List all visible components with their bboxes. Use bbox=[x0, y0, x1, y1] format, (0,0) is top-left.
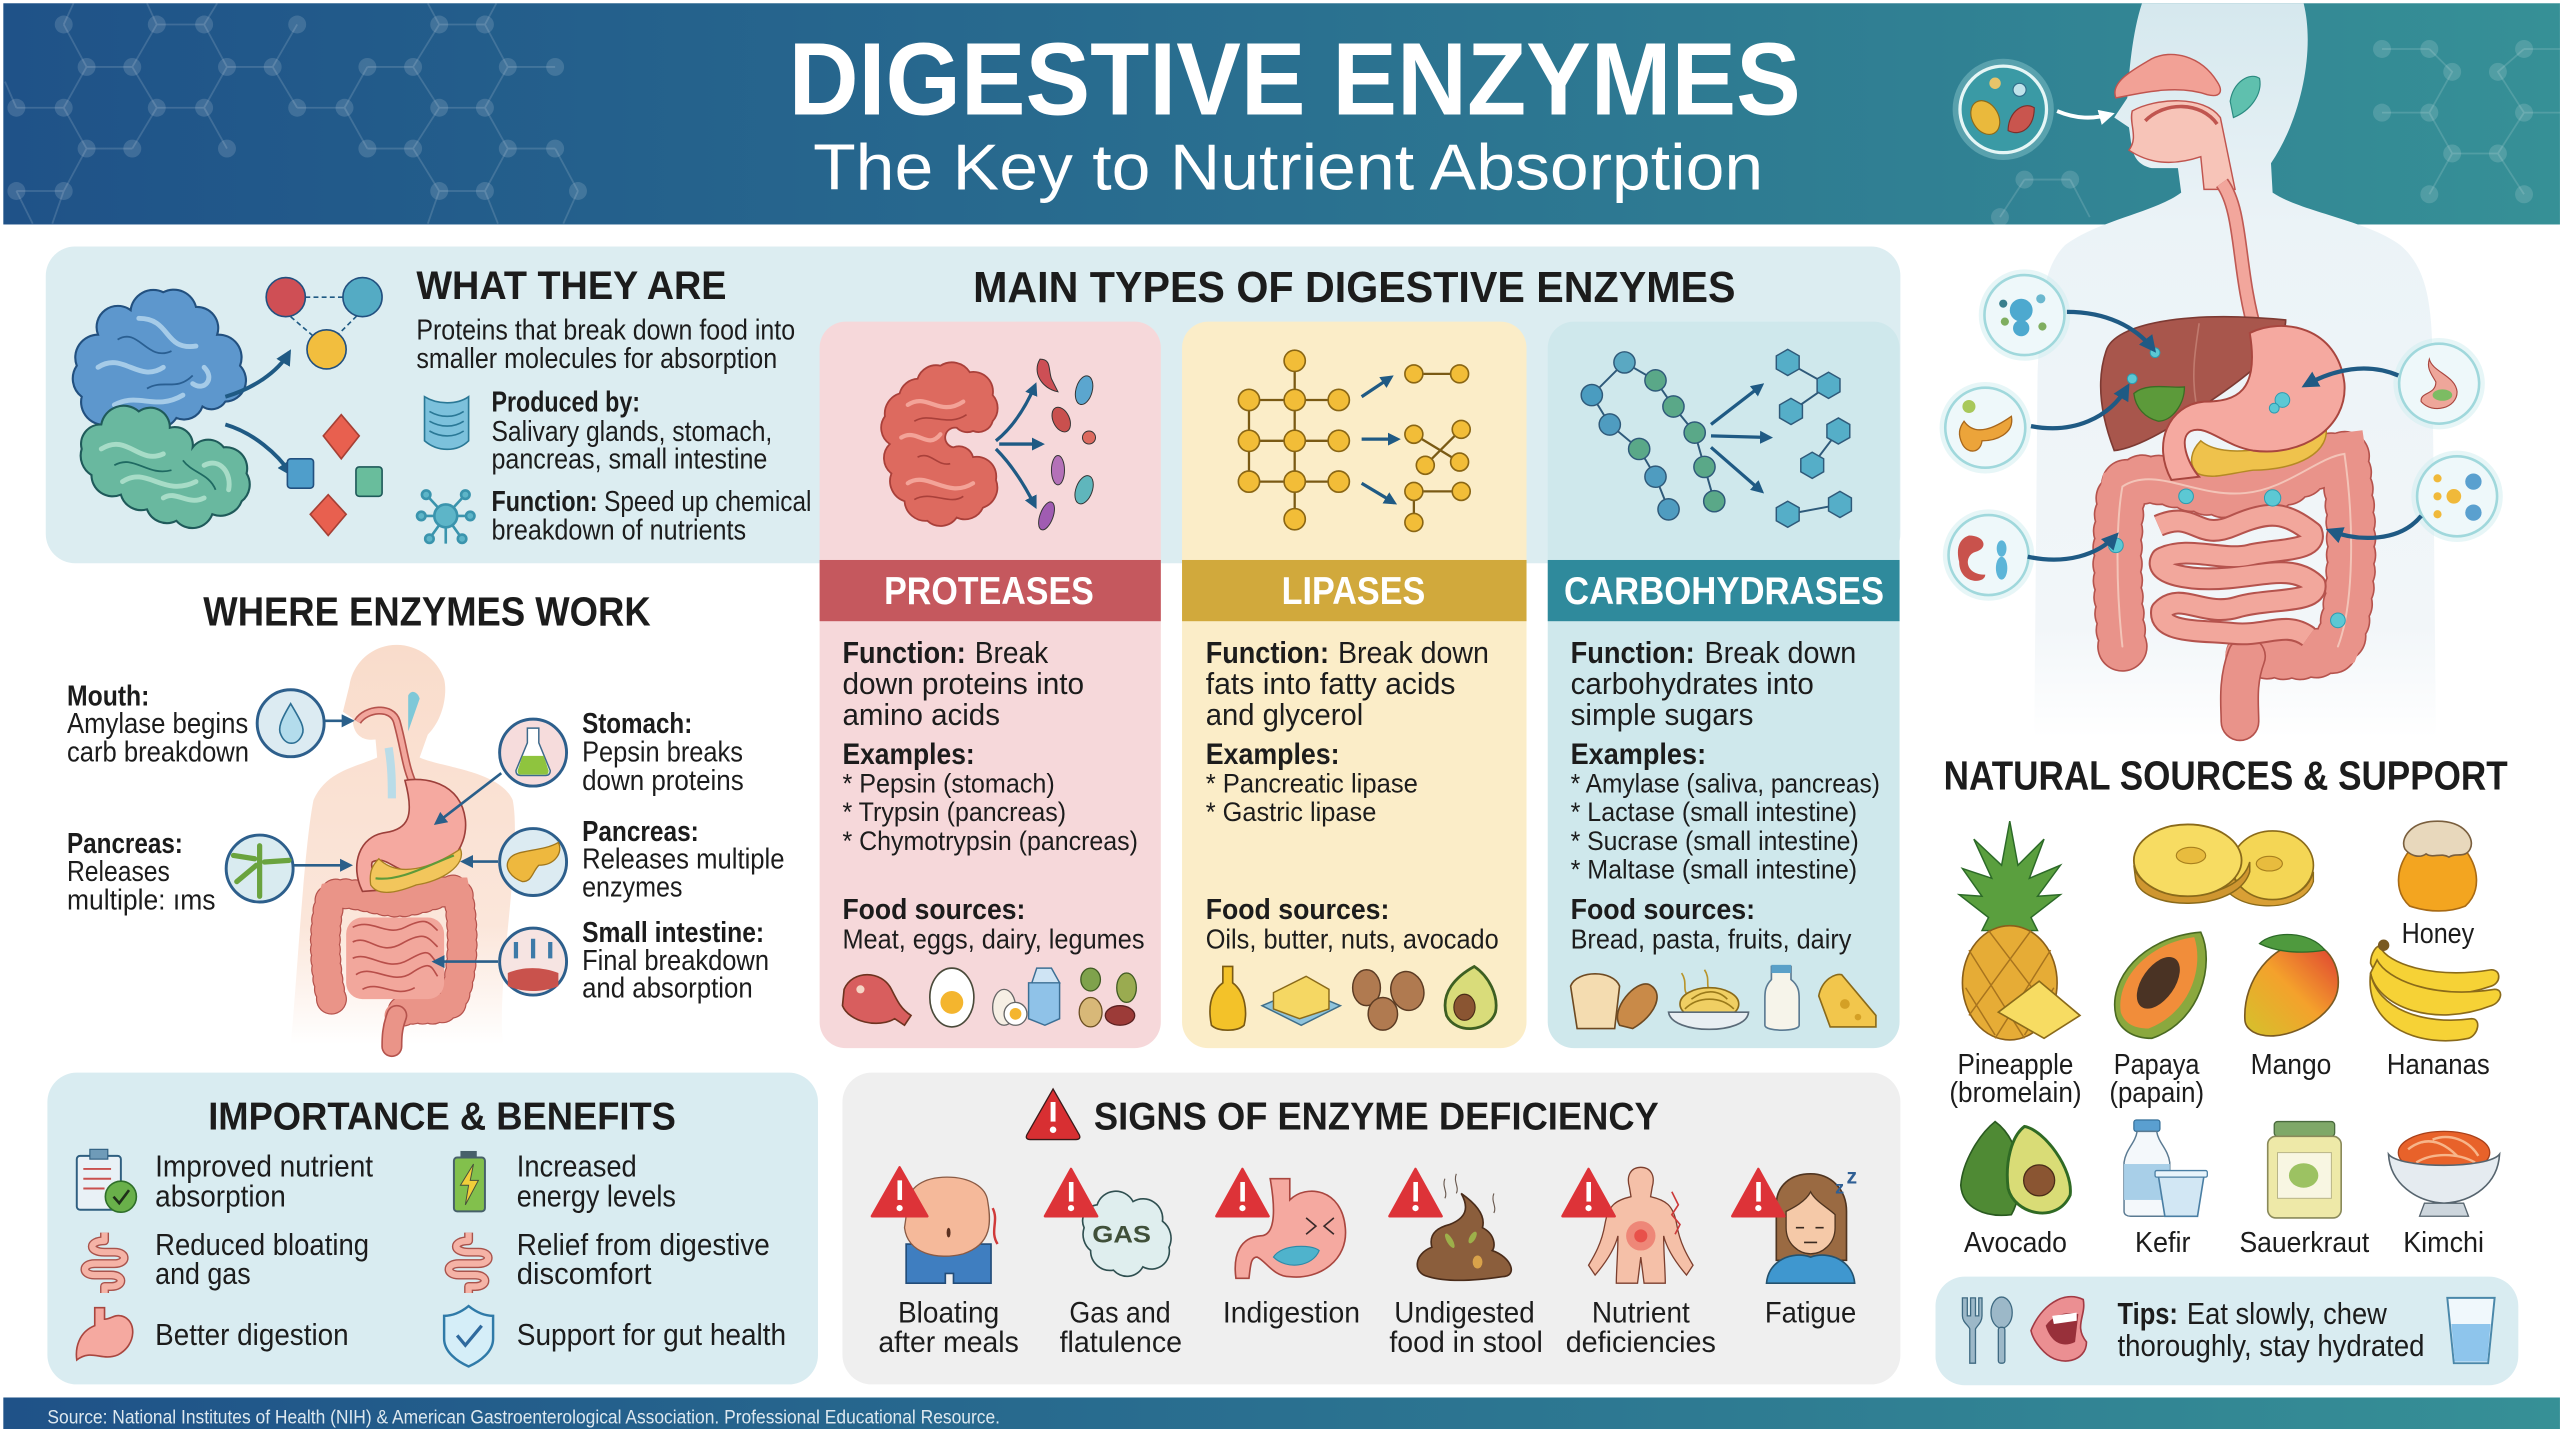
card: lipases bbox=[1182, 322, 1527, 1048]
sign: undigested food bbox=[1389, 1169, 1543, 1359]
label: Bloating bbox=[898, 1296, 999, 1329]
sign: fatigue bbox=[1732, 1166, 1857, 1329]
food icons: fats bbox=[1210, 966, 1496, 1030]
card: proteases bbox=[820, 322, 1161, 1048]
protein illustration bbox=[73, 278, 382, 535]
label: deficiencies bbox=[1566, 1326, 1716, 1359]
section: where enzymes work bbox=[67, 588, 785, 1046]
lipases text: Function: bbox=[1206, 637, 1329, 670]
circle: food bbox=[1953, 59, 2054, 160]
text: Mouth: bbox=[67, 680, 149, 712]
arrow bbox=[464, 861, 498, 863]
carbohydrases text: Break down bbox=[1704, 637, 1856, 670]
benefit: nutrient absorption bbox=[77, 1149, 374, 1213]
icon: fork and spoon bbox=[1962, 1297, 2012, 1363]
icon: intestine bbox=[449, 1233, 488, 1293]
anatomy arrows bbox=[2028, 312, 2421, 560]
heading: SIGNS OF ENZYME DEFICIENCY bbox=[1094, 1096, 1659, 1139]
text: Increased bbox=[517, 1151, 637, 1184]
esophagus bbox=[2222, 183, 2256, 335]
arrow bbox=[435, 961, 498, 963]
lipases text bbox=[1206, 637, 1499, 955]
heading: what they are: WHAT THEY ARE bbox=[416, 264, 727, 308]
text: energy levels bbox=[517, 1180, 676, 1213]
label: Undigested bbox=[1394, 1296, 1535, 1329]
text: down proteins bbox=[582, 765, 744, 797]
icon: stomach bbox=[1235, 1179, 1346, 1278]
text bbox=[582, 917, 769, 1005]
icon: shield bbox=[444, 1306, 493, 1366]
proteases text: * Trypsin (pancreas) bbox=[842, 797, 1066, 827]
subtitle: The Key to Nutrient Absorption bbox=[813, 130, 1763, 203]
sign: gas bbox=[1045, 1169, 1182, 1359]
benefit: gut health bbox=[444, 1306, 786, 1366]
text bbox=[517, 1151, 676, 1213]
labels: fermented row: Sauerkraut bbox=[2239, 1227, 2369, 1259]
food: papaya bbox=[2115, 932, 2206, 1038]
description bbox=[416, 315, 795, 375]
enzyme highlights bbox=[2109, 348, 2345, 628]
band: carbohydrases: CARBOHYDRASES bbox=[1564, 570, 1884, 613]
text bbox=[155, 1229, 369, 1291]
icon: warning heading bbox=[1026, 1089, 1080, 1140]
food: pineapple rings bbox=[2134, 824, 2313, 906]
circle: pancreas bbox=[1940, 382, 2031, 473]
band: proteases bbox=[820, 560, 1161, 621]
carbohydrases text: * Maltase (small intestine) bbox=[1571, 854, 1857, 884]
food: kimchi bbox=[2389, 1131, 2500, 1216]
gallbladder bbox=[2134, 387, 2184, 421]
labels: fermented row: Kefir bbox=[2135, 1227, 2191, 1259]
hexagon molecule pattern right bbox=[1991, 40, 2560, 226]
label: honey: Honey bbox=[2402, 918, 2475, 950]
proteases text: * Pepsin (stomach) bbox=[842, 769, 1055, 799]
label: food in stool bbox=[1389, 1326, 1543, 1359]
stomach bbox=[357, 779, 466, 891]
callout: stomach bbox=[437, 708, 744, 823]
proteases text bbox=[842, 637, 1144, 955]
food: honey bbox=[2399, 821, 2476, 911]
salivary gland bbox=[408, 692, 420, 731]
text bbox=[155, 1151, 374, 1213]
text: and gas bbox=[155, 1258, 251, 1291]
circle: stomach bbox=[2393, 338, 2485, 429]
callout: mouth bbox=[67, 680, 351, 769]
labels: fruit row: Papaya bbox=[2114, 1049, 2200, 1081]
icon: tired woman bbox=[1767, 1166, 1857, 1283]
text: Better digestion bbox=[155, 1319, 349, 1352]
carbohydrases text: Food sources: bbox=[1571, 894, 1755, 926]
source text: Source: National Institutes of Health (NIH) & American Gastroenterological Association. Professional Educational Resource. bbox=[47, 1407, 1000, 1429]
enzyme blue lobe bbox=[73, 290, 246, 431]
header banner bbox=[3, 3, 2560, 226]
food: mango bbox=[2245, 935, 2338, 1036]
labels: fruit row: Hananas bbox=[2387, 1049, 2490, 1081]
tips text: thoroughly, stay hydrated bbox=[2118, 1330, 2424, 1363]
colon bbox=[2118, 454, 2351, 722]
panel: signs of enzyme deficiency bbox=[842, 1073, 1900, 1384]
text: Relief from digestive bbox=[517, 1229, 770, 1262]
sign: bloating bbox=[872, 1167, 1019, 1359]
small intestine bbox=[346, 918, 444, 999]
benefit: relief bbox=[449, 1229, 770, 1293]
lipases text: and glycerol bbox=[1206, 699, 1363, 732]
labels: fruit row: Pineapple bbox=[1958, 1049, 2073, 1081]
text: and absorption bbox=[582, 973, 753, 1005]
function text bbox=[491, 486, 811, 547]
text bbox=[67, 828, 216, 916]
icon: pancreas bbox=[500, 829, 567, 895]
carbohydrases text: * Lactase (small intestine) bbox=[1571, 797, 1857, 827]
carbohydrases text: simple sugars bbox=[1571, 699, 1753, 732]
band: proteases: PROTEASES bbox=[884, 570, 1094, 613]
callout: small intestine bbox=[435, 917, 769, 1005]
footer bbox=[3, 1397, 2560, 1429]
lipases text: Examples: bbox=[1206, 738, 1340, 771]
proteases text: down proteins into bbox=[842, 668, 1084, 701]
benefit: bloating bbox=[85, 1229, 369, 1293]
carbohydrases text: * Sucrase (small intestine) bbox=[1571, 826, 1859, 856]
title: DIGESTIVE ENZYMES bbox=[789, 21, 1801, 136]
label: Gas and bbox=[1069, 1296, 1171, 1329]
label bbox=[1060, 1296, 1182, 1359]
icon: body bbox=[1589, 1167, 1693, 1283]
illustration: protein breakdown bbox=[881, 359, 1097, 532]
description: Proteins that break down food into bbox=[416, 315, 795, 347]
icon: gas cloud: GAS bbox=[1092, 1221, 1151, 1248]
band: lipases bbox=[1182, 560, 1527, 621]
label: Nutrient bbox=[1592, 1296, 1690, 1329]
icon: stool bbox=[1417, 1174, 1511, 1280]
panel: importance and benefits bbox=[47, 1073, 818, 1384]
labels: fruit row: (bromelain) bbox=[1949, 1077, 2082, 1109]
icon: warning bbox=[1562, 1169, 1615, 1216]
proteases text: Break bbox=[975, 637, 1049, 670]
food: banana bbox=[2370, 940, 2501, 1041]
icon: tired woman: z bbox=[1847, 1166, 1857, 1189]
panel: tips bbox=[1935, 1277, 2518, 1385]
produced by text: pancreas, small intestine bbox=[491, 444, 767, 476]
arrows bbox=[225, 353, 291, 473]
function text: breakdown of nutrients bbox=[491, 515, 746, 547]
labels: fermented row: Avocado bbox=[1964, 1227, 2067, 1259]
icon: glass of water bbox=[2447, 1298, 2495, 1363]
tips text: Eat slowly, chew bbox=[2187, 1298, 2387, 1331]
carbohydrases text: * Amylase (saliva, pancreas) bbox=[1571, 769, 1880, 799]
lipases text: * Pancreatic lipase bbox=[1206, 769, 1418, 799]
label bbox=[878, 1296, 1019, 1359]
text: discomfort bbox=[517, 1258, 652, 1291]
label: flatulence bbox=[1060, 1326, 1182, 1359]
icon: belly bbox=[905, 1177, 998, 1283]
text: Support for gut health bbox=[517, 1319, 786, 1352]
text: absorption bbox=[155, 1180, 286, 1213]
produced by text: Produced by: bbox=[491, 386, 640, 418]
small body figure bbox=[291, 645, 515, 1046]
icon: enzyme bbox=[417, 490, 474, 544]
proteases text: Function: bbox=[842, 637, 966, 670]
icon: warning bbox=[1045, 1169, 1097, 1216]
text: multiple: ıms bbox=[67, 884, 216, 916]
heading: main types: MAIN TYPES OF DIGESTIVE ENZYMES bbox=[973, 264, 1735, 312]
icon: intestine bbox=[85, 1233, 124, 1293]
stomach bbox=[2163, 326, 2345, 480]
labels: fruit row: (papain) bbox=[2109, 1077, 2204, 1109]
text bbox=[582, 708, 744, 797]
carbohydrases text: Examples: bbox=[1571, 738, 1706, 771]
text bbox=[582, 816, 785, 903]
icon: villi absorption bbox=[500, 928, 567, 995]
icon: tired woman: z bbox=[1835, 1177, 1844, 1197]
text: carb breakdown bbox=[67, 737, 249, 769]
labels: fermented row bbox=[1964, 1227, 2484, 1259]
proteases text: Examples: bbox=[842, 738, 975, 771]
band: carbohydrases bbox=[1548, 560, 1900, 621]
proteases text: amino acids bbox=[842, 699, 1000, 732]
circle: intestine bbox=[1943, 509, 2034, 601]
icon: warning bbox=[872, 1167, 927, 1216]
salivary gland bbox=[2230, 76, 2260, 118]
labels: fruit row: Mango bbox=[2251, 1049, 2331, 1081]
food: avocado bbox=[1961, 1122, 2070, 1215]
lipases text: * Gastric lipase bbox=[1206, 797, 1376, 827]
lipases text: Food sources: bbox=[1206, 894, 1389, 926]
produced by text: Salivary glands, stomach, bbox=[491, 416, 772, 448]
callout: pancreas left bbox=[67, 828, 349, 916]
label bbox=[1389, 1296, 1543, 1359]
food icons: protein foods bbox=[842, 968, 1136, 1027]
text: Small intestine: bbox=[582, 917, 764, 949]
arrow bbox=[437, 773, 501, 823]
text: Amylase begins bbox=[67, 708, 248, 740]
enzyme green lobe bbox=[81, 406, 250, 528]
card: carbohydrases bbox=[1548, 322, 1900, 1048]
text: Pancreas: bbox=[67, 828, 183, 860]
illustration: carbohydrate chain bbox=[1581, 349, 1851, 527]
panel: what they are background bbox=[46, 247, 1900, 563]
lipases text: Oils, butter, nuts, avocado bbox=[1206, 924, 1499, 955]
food: sauerkraut bbox=[2268, 1122, 2341, 1218]
text bbox=[517, 1229, 770, 1291]
text: Pancreas: bbox=[582, 816, 699, 848]
labels: fermented row: Kimchi bbox=[2403, 1227, 2484, 1259]
text: Releases bbox=[67, 856, 170, 888]
icon: warning bbox=[1389, 1169, 1442, 1216]
carbohydrases text: carbohydrates into bbox=[1571, 668, 1814, 701]
food: kefir bbox=[2124, 1120, 2207, 1216]
colon bbox=[325, 890, 462, 1046]
benefit: better digestion bbox=[76, 1308, 349, 1360]
description: smaller molecules for absorption bbox=[416, 343, 777, 375]
icon: warning bbox=[1216, 1169, 1269, 1216]
liver bbox=[2101, 317, 2286, 451]
text: Reduced bloating bbox=[155, 1229, 369, 1262]
circle: molecule bbox=[2411, 451, 2503, 542]
band: lipases: LIPASES bbox=[1282, 570, 1425, 613]
food icons: carbs bbox=[1571, 965, 1876, 1030]
sign: nutrient deficiencies bbox=[1562, 1167, 1716, 1359]
callout: pancreas right bbox=[464, 816, 785, 903]
label: Fatigue bbox=[1765, 1296, 1856, 1329]
proteases text: Food sources: bbox=[842, 894, 1025, 926]
lipases text: fats into fatty acids bbox=[1206, 668, 1456, 701]
arrow bbox=[294, 864, 349, 866]
label: Indigestion bbox=[1223, 1296, 1360, 1329]
text: Final breakdown bbox=[582, 945, 769, 977]
tips text bbox=[2118, 1298, 2424, 1363]
benefit: energy bbox=[454, 1151, 676, 1213]
pancreas bbox=[370, 849, 461, 892]
illustration: fat molecule breakdown bbox=[1238, 350, 1470, 531]
pancreas bbox=[2192, 421, 2326, 476]
large body anatomy illustration bbox=[1940, 3, 2503, 738]
carbohydrases text bbox=[1571, 637, 1880, 955]
text: Improved nutrient bbox=[155, 1151, 374, 1184]
text: Stomach: bbox=[582, 708, 692, 740]
body silhouette bbox=[2034, 3, 2436, 738]
function text: Speed up chemical bbox=[604, 486, 811, 518]
icon: droplet bbox=[257, 690, 324, 757]
icon: stomach bbox=[76, 1308, 133, 1360]
label: after meals bbox=[878, 1326, 1019, 1359]
text: enzymes bbox=[582, 871, 682, 903]
arrow: food to mouth bbox=[2057, 111, 2111, 118]
small intestine bbox=[2158, 515, 2315, 637]
carbohydrases text: Function: bbox=[1571, 637, 1695, 670]
tips text: Tips: bbox=[2118, 1298, 2178, 1331]
function text: Function: bbox=[491, 486, 598, 518]
arrow bbox=[324, 720, 351, 722]
hexagon molecule pattern left bbox=[5, 3, 587, 224]
icon: gas cloud bbox=[1083, 1191, 1171, 1276]
proteases text: * Chymotrypsin (pancreas) bbox=[842, 826, 1138, 856]
icon: clipboard bbox=[77, 1149, 136, 1212]
mouth and throat bbox=[358, 711, 415, 787]
nasal cavity and mouth bbox=[2115, 54, 2235, 189]
icon: flask bbox=[500, 719, 567, 786]
food: pineapple bbox=[1959, 821, 2080, 1040]
heading: IMPORTANCE & BENEFITS bbox=[208, 1096, 676, 1139]
icon: duct bbox=[226, 835, 293, 902]
carbohydrases text: Bread, pasta, fruits, dairy bbox=[1571, 924, 1852, 955]
icon: battery bbox=[454, 1151, 485, 1211]
label bbox=[1566, 1296, 1716, 1359]
text: Pepsin breaks bbox=[582, 737, 743, 769]
sign: indigestion bbox=[1216, 1169, 1360, 1329]
produced by text bbox=[491, 386, 772, 476]
text bbox=[67, 680, 249, 769]
icon: warning bbox=[1732, 1169, 1784, 1216]
labels: fruit row bbox=[1949, 1049, 2490, 1109]
icon: scroll bbox=[425, 397, 469, 449]
icon: mouth bbox=[2031, 1297, 2086, 1361]
proteases text: Meat, eggs, dairy, legumes bbox=[842, 924, 1144, 955]
heading: WHERE ENZYMES WORK bbox=[203, 588, 651, 634]
lipases text: Break down bbox=[1338, 637, 1489, 670]
molecules bbox=[266, 278, 382, 535]
text: Releases multiple bbox=[582, 844, 785, 876]
circle: enzyme molecule bbox=[1979, 269, 2070, 361]
section: natural sources and support bbox=[1935, 752, 2518, 1385]
